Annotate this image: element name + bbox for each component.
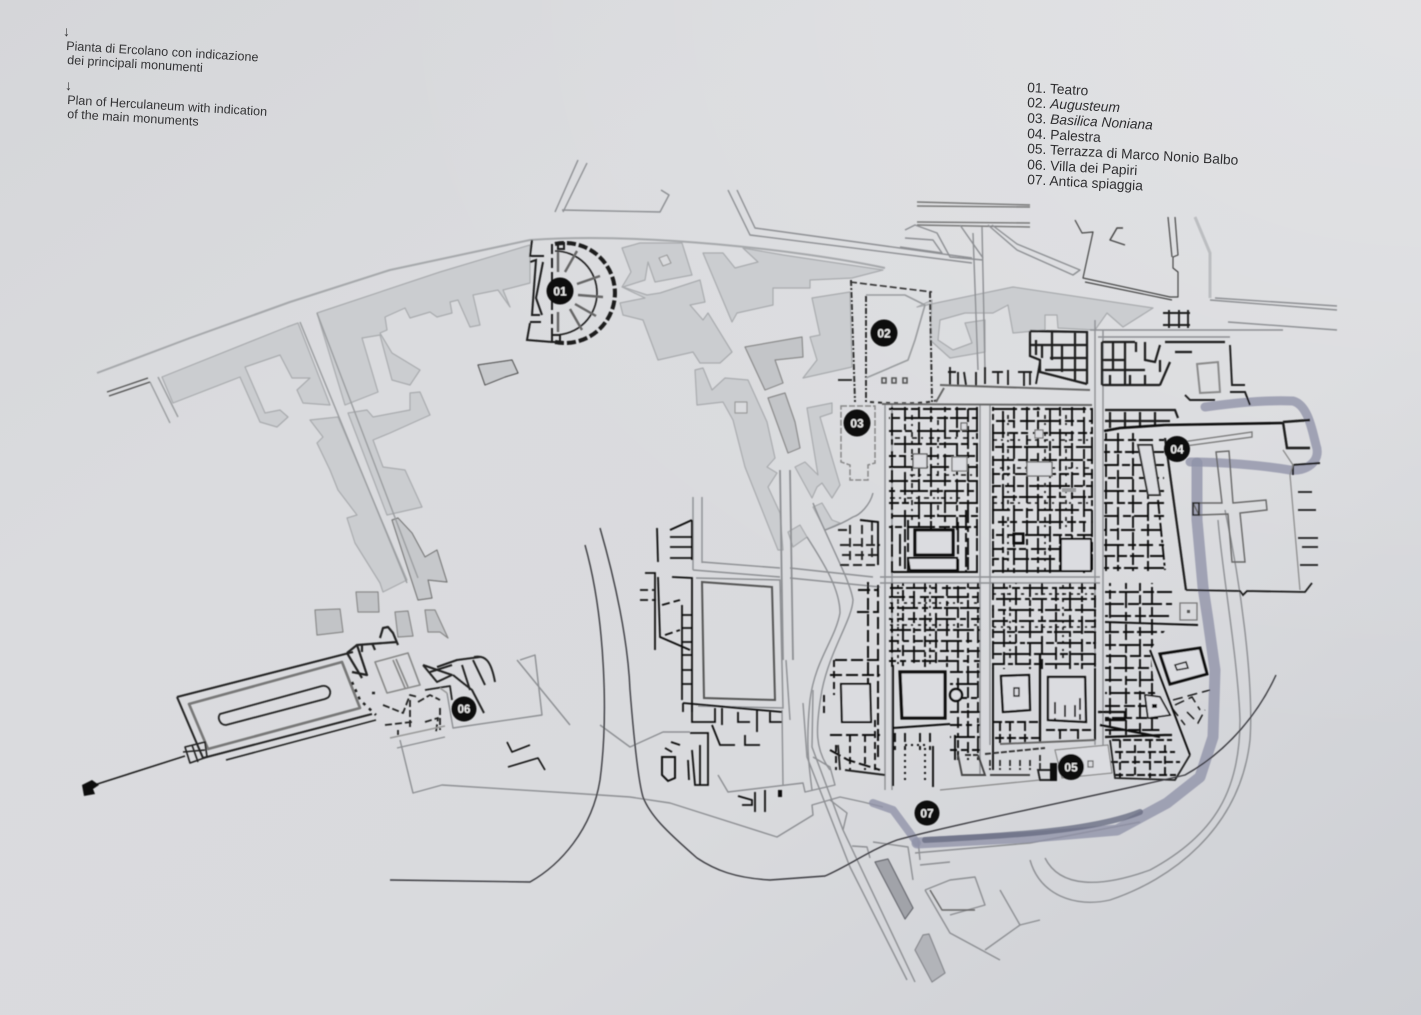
panel: insula right of cardo V: [1103, 420, 1284, 572]
panel: Palestra: [1165, 420, 1320, 595]
legend: monuments list: 05. Terrazza di Marco Nonio Balbo: [1027, 141, 1239, 168]
panel: insula III: [888, 406, 979, 574]
marker: 01: 01: [553, 284, 567, 298]
legend: monuments list: 07. Antica spiaggia: [1027, 172, 1144, 193]
icon: Villa tunnel line with endpoint: [82, 756, 185, 796]
panel: insula IV: [991, 406, 1094, 574]
panel: Teatro plan: [527, 240, 615, 343]
legend: monuments list: [1027, 80, 1239, 193]
caption: Italian and English: Plan of Herculaneum with indication: [67, 93, 268, 119]
legend: monuments list: 06. Villa dei Papiri: [1027, 157, 1138, 178]
marker: 06: 06: [458, 704, 470, 716]
marker: 03: 03: [850, 416, 864, 430]
marker: 04: [1164, 436, 1190, 462]
marker: 05: [1058, 754, 1084, 780]
map of Herculaneum: [82, 160, 1337, 982]
marker: 01: [546, 278, 574, 304]
panel: Villa dei Papiri peristyle and plan: [177, 627, 545, 770]
caption: Italian and English: ↓: [63, 23, 70, 39]
unexcavated buildings shading: [162, 243, 1153, 982]
marker: 07: 07: [920, 806, 934, 820]
gray street and outline lines: [97, 160, 1337, 982]
legend: monuments list: 01. Teatro: [1027, 80, 1089, 98]
panel: Augusteum walls: [838, 280, 938, 403]
legend: monuments list: 02. Augusteum: [1027, 95, 1120, 115]
panel: area sacra west complex: [640, 520, 783, 812]
caption: Italian and English: of the main monuments: [67, 107, 199, 129]
legend: monuments list: 03. Basilica Noniana: [1027, 111, 1154, 133]
marker: 02: [870, 320, 898, 346]
marker: 05: 05: [1064, 760, 1078, 774]
caption: Italian and English: Pianta di Ercolano con indicazione: [66, 39, 259, 64]
caption: Italian and English: dei principali monumenti: [67, 53, 203, 75]
marker: 07: [914, 800, 940, 826]
marker: 06: [452, 696, 476, 722]
marker: 02: 02: [877, 326, 891, 340]
caption: Italian and English: [63, 23, 268, 129]
panel: lower insulae: [824, 520, 1210, 790]
street frontage north of the city: [882, 310, 1250, 428]
ancient shoreline band: [873, 401, 1317, 843]
marker: 03: [844, 410, 870, 436]
legend: monuments list: 04. Palestra: [1027, 126, 1102, 145]
panel: Basilica Noniana outline: [841, 406, 875, 480]
caption: Italian and English: ↓: [65, 77, 72, 93]
section line curves: [390, 528, 1276, 882]
marker: 04: 04: [1170, 442, 1184, 456]
